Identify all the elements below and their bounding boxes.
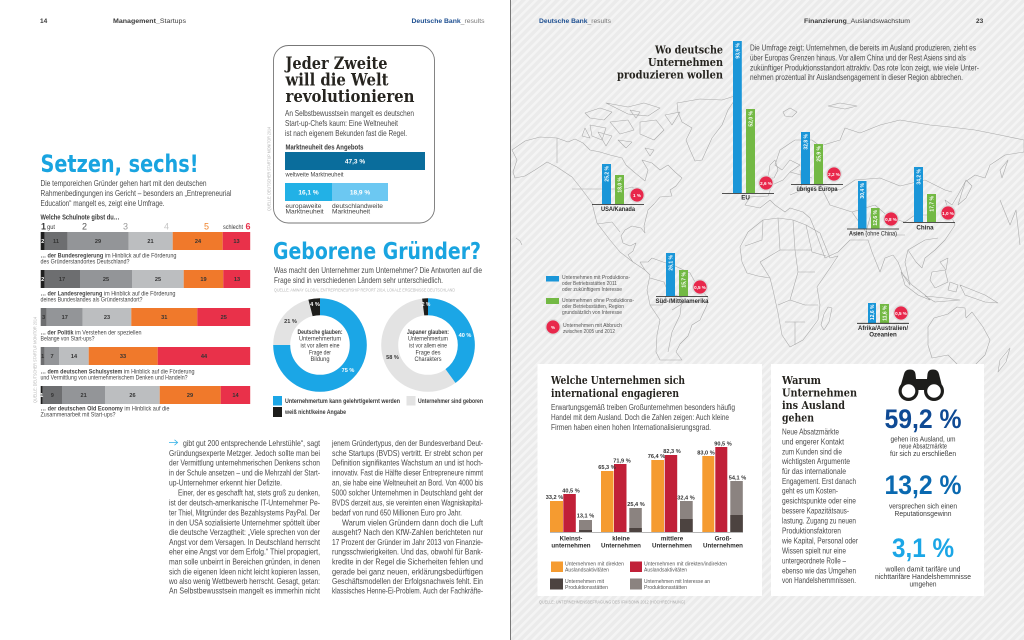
map bars: Asien (ohne China) xyxy=(847,181,899,238)
body text: und engerer Kontakt xyxy=(782,436,845,446)
intro text: ist nach eigenem Bekunden fast die Regel. xyxy=(285,128,407,138)
chart legend: Produktionsstätten xyxy=(644,585,687,591)
stat: 59,2 %: gehen ins Ausland, um xyxy=(890,434,956,444)
intro text xyxy=(40,178,232,208)
bar chart: 65,3 % xyxy=(598,465,616,471)
map bars: übriges Europa: 25,9 % xyxy=(816,145,822,162)
map bars: Afrika/Australien/Ozeanien: Ozeanien xyxy=(869,332,897,338)
article text: column 2: an, sie habe eine Weltneuheit an Bord. Von 4000 bis xyxy=(332,477,483,487)
panel: Setzen, sechs! school grades xyxy=(32,150,251,418)
map bars: USA/Kanada: 18,0 % xyxy=(617,176,623,193)
header: left page: Management_ Startups xyxy=(113,18,187,25)
bar chart: 76,4 % xyxy=(648,454,665,460)
source note: QUELLE: AMWAY GLOBAL ENTREPRENEURSHIP REPORT 2014, LOKALE ERGEBNISSE DEUTSCHLAND xyxy=(274,288,456,292)
bar captions: und Vermittlung von unternehmerischem Denken und Handeln? xyxy=(40,374,188,382)
map bars: EU: 93,9 % xyxy=(735,42,741,59)
chart legend: Auslandsaktivitäten xyxy=(644,568,687,574)
intro text xyxy=(274,265,482,285)
source note: international: QUELLE: UNTERNEHMENSBEFRAGUNG DES IFM BONN 2012 (HOCHRECHNUNG) xyxy=(539,600,685,604)
bar: weltweite Marktneuheit xyxy=(285,152,425,178)
stat: 13,2 % xyxy=(884,470,962,518)
bar: weltweite Marktneuheit: 47,3 % xyxy=(345,158,365,166)
header: right page: 23 xyxy=(976,18,984,25)
bar captions: … dem deutschen Schulsystem im Hinblick auf die Förderung xyxy=(40,368,195,376)
grade scale: 1 xyxy=(41,222,46,232)
map legend: Unternehmen mit Abbruch xyxy=(563,323,622,329)
grade scale: 3 xyxy=(123,222,128,232)
bar values: 29 xyxy=(187,393,193,399)
bar chart: 32,4 % xyxy=(677,496,695,502)
bar chart: 33,2 % xyxy=(546,495,563,501)
heading: Setzen, sechs!: Setzen, sechs! xyxy=(40,150,198,178)
map bars: USA/Kanada: 1 % xyxy=(633,193,641,198)
map bars: übriges Europa: übriges Europa xyxy=(796,186,838,193)
donut chart: Japaner: 40 % xyxy=(459,333,471,339)
bar chart: 83,0 % xyxy=(697,450,715,456)
bar values: 17 xyxy=(59,277,65,283)
bar values: 25 xyxy=(103,277,109,283)
source note: QUELLE: DEUTSCHER STARTUP MONITOR 2014 xyxy=(266,127,272,211)
bar values: 14 xyxy=(71,354,78,360)
bar captions: Belange von Start-ups? xyxy=(40,336,95,342)
bar values: 26 xyxy=(129,393,136,399)
article text: column 1: der Vermittlung unternehmerischen Denkens schon xyxy=(169,458,320,468)
map bars: Süd-/Mittelamerika xyxy=(656,253,709,305)
stat: 3,1 % xyxy=(875,533,971,588)
grade scale: 2 xyxy=(82,222,87,232)
bar captions: des Gründerstandortes Deutschland? xyxy=(40,258,130,266)
intro text: Start-up-Chefs kaum: Eine Weltneuheit xyxy=(285,118,399,128)
map intro text xyxy=(750,42,979,82)
article text: column 2: klassisches Henne-Ei-Problem. Auch der Fachkräfte- xyxy=(332,586,483,596)
heading xyxy=(284,54,414,107)
donut chart: Japaner: Frage des xyxy=(416,350,440,356)
map legend: oder Betriebsstätten, Region xyxy=(562,304,624,310)
article text: column 1: Angst vor dem Versagen. In Deutschland herrscht xyxy=(169,537,321,547)
bar captions: … der deutschen Old Economy im Hinblick auf die xyxy=(40,406,170,412)
rounded box xyxy=(274,46,434,223)
panel background xyxy=(538,364,762,596)
world map outline xyxy=(512,95,1024,372)
map bars: China: China xyxy=(916,224,934,232)
article text: column 1: Einer, der es geschafft hat, stets groß zu denken, xyxy=(178,487,320,497)
stat: 3,1 %: wollen damit tarifäre und xyxy=(885,564,960,574)
body text: Wissen spielt nur eine xyxy=(782,546,846,556)
intro text xyxy=(551,402,735,432)
map bars: Asien (ohne China): 0,8 % xyxy=(885,217,897,222)
heading: international engagieren xyxy=(551,386,680,400)
body text: wie Kapital, Personal oder xyxy=(781,535,858,545)
bar captions: … der Bundesregierung im Hinblick auf die Förderung xyxy=(40,252,177,260)
bar: europaweite Marktneuheit xyxy=(285,183,332,216)
bar chart: mittlere xyxy=(661,536,684,542)
donut legend xyxy=(273,396,483,417)
donut chart: Deutsche: ist vor allem eine xyxy=(300,342,340,350)
heading: Warum xyxy=(781,373,821,387)
bar chart: Unternehmen xyxy=(652,542,692,550)
donut chart: Japaner: Unternehmertum xyxy=(408,336,448,342)
intro text: An Selbstbewusstsein mangelt es deutschen xyxy=(285,108,414,118)
chart legend: Unternehmen mit direkten xyxy=(565,562,624,568)
bar captions: … der Politik im Verstehen der speziellen xyxy=(40,330,142,336)
article text: column 1: in den USA sozialisierte Unternehmer spöttelt über xyxy=(169,517,320,527)
bar chart: kleine xyxy=(612,536,630,542)
header: left page: 14 xyxy=(40,18,48,25)
donut chart: Deutsche xyxy=(282,302,358,383)
donut legend: Unternehmer sind geboren xyxy=(418,398,483,405)
grade scale: schlecht xyxy=(223,224,243,231)
bar chart: Kleinst- xyxy=(560,536,582,542)
intro text: Handel mit dem Ausland. Doch die Zahlen zeigen: Auch kleine xyxy=(551,412,729,422)
donut chart: Deutsche: Unternehmertum xyxy=(299,336,341,342)
bar values: 21 xyxy=(80,393,87,399)
article text: column 2: ausgeht? Nach den KfW-Zahlen berichteten nur xyxy=(332,527,483,537)
header: right page: Deutsche Bank_results xyxy=(539,18,612,25)
heading: revolutionieren xyxy=(286,87,414,107)
map bars: China xyxy=(903,167,956,232)
article text: column 1: Gründungsexperte Metzger. Jedoch sollte man bei xyxy=(169,448,320,458)
map bars: USA/Kanada: USA/Kanada xyxy=(601,206,636,213)
bar captions: Zusammenarbeit mit Start-ups? xyxy=(40,412,116,418)
article text: column 1: die deutsche Verzagtheit: „Viele sprechen von der xyxy=(169,527,320,537)
grade scale: gut xyxy=(47,224,55,231)
map bars: EU: EU xyxy=(741,194,750,202)
stacked bars xyxy=(41,232,250,404)
map bars: EU: 2,6 % xyxy=(760,181,772,186)
donut legend: weiß nicht/keine Angabe xyxy=(284,409,346,416)
body text: lastung. Zugang zu neuen xyxy=(782,516,856,526)
article text: column 2: 5000 solcher Unternehmen in Deutschland geht der xyxy=(332,487,483,497)
bar values: 1 xyxy=(41,354,44,360)
article text: column 2: bedarf von rund 650 Millionen Euro pro Jahr. xyxy=(332,507,462,517)
article text: column 1: eher eine Angst vor dem Erfolg.“ Thiel propagiert, xyxy=(169,547,320,557)
arrow xyxy=(169,440,178,445)
heading: Jeder Zweite xyxy=(284,54,388,74)
article text: column 2 xyxy=(331,438,484,596)
body text: gesichtspunkte oder eine xyxy=(782,496,856,506)
map bars: übriges Europa: 2,2 % xyxy=(828,172,840,177)
article text: column 1: wo also wenig Wettbewerb herrscht. Gesagt, getan: xyxy=(168,576,320,586)
bar values: 17 xyxy=(62,315,68,321)
map bars: Afrika/Australien/Ozeanien: Afrika/Australien/ xyxy=(858,325,908,332)
donut chart: Japaner: 2 % xyxy=(422,302,431,308)
body text: für das internationale xyxy=(782,466,846,476)
bar chart: Unternehmen xyxy=(703,542,743,550)
map legend: Unternehmen mit Produktions- xyxy=(562,275,630,281)
donut chart: Deutsche: 75 % xyxy=(342,368,354,374)
chart legend: Unternehmen mit xyxy=(565,579,604,585)
donut chart: Deutsche: Frage der xyxy=(309,350,331,356)
article text: column 1: An Selbstbewusstsein mangelt es immerhin nicht xyxy=(169,586,321,596)
map legend xyxy=(545,275,634,335)
panel: Geborene Gründer? xyxy=(273,239,483,417)
panel: Jeder Zweite will die Welt revolutionieren xyxy=(266,46,434,223)
article text: column 2: BVDS derzeit aus, sie vereinten einen Wagniskapital- xyxy=(332,497,483,507)
bar values: 3 xyxy=(42,315,45,321)
donut chart: Deutsche: Bildung xyxy=(310,356,330,363)
bar: deutschlandweite Marktneuheit: Marktneuheit xyxy=(332,208,370,216)
bar values: 11 xyxy=(53,239,59,245)
article text: column 1: up-Unternehmer erkennt hier Defizite. xyxy=(169,477,282,487)
heading: Wo deutsche Unternehmen produzieren wollen: Wo deutsche xyxy=(654,44,723,56)
map bars: EU: 52,0 % xyxy=(748,110,754,127)
bar values: 25 xyxy=(155,277,161,283)
intro text: Rahmenbedingungen ins Gericht – besonders an „Entrepreneurial xyxy=(40,188,232,198)
bar chart: 90,5 % xyxy=(714,442,732,448)
heading: Geborene Gründer? xyxy=(273,239,481,265)
intro text: Erwartungsgemäß treiben Großunternehmen besonders häufig xyxy=(551,402,735,412)
intro text: Firmen haben einen hohen Internationalisierungsgrad. xyxy=(551,422,711,432)
article text: column 2: rungsschwierigkeiten. Und das, obwohl für Bank- xyxy=(332,547,483,557)
bar chart: Unternehmen xyxy=(601,542,641,550)
bar captions: deines Bundeslandes als Gründerstandort? xyxy=(40,296,143,304)
body text: Produktionsfaktoren xyxy=(782,525,841,535)
body text xyxy=(781,426,858,585)
map bars: Asien (ohne China): 12,6 % xyxy=(873,209,879,226)
donut chart: Japaner: ist vor allem eine xyxy=(409,342,447,350)
bar captions: … der Landesregierung im Hinblick auf die Förderung xyxy=(40,290,176,298)
heading: Unternehmen xyxy=(782,386,858,400)
bar: europaweite Marktneuheit: 16,1 % xyxy=(298,190,319,196)
map intro text: nehmen prozentual ihr Auslandsengagement in dieser Region abbrechen. xyxy=(750,72,963,82)
header: right page: Finanzierung_ Auslandswachstum xyxy=(804,18,910,25)
article text: column 2: kredite in der Regel die Sicherheiten fehlen und xyxy=(332,556,483,566)
header: left page: Deutsche Bank _results xyxy=(412,18,485,25)
map bars: übriges Europa xyxy=(791,132,843,193)
chart legend: Unternehmen mit direkten/indirekten xyxy=(644,562,727,568)
article text: column 2: sche Startups (BVDS) vertritt. Er strebt schon per xyxy=(332,448,483,458)
bar values: 13 xyxy=(233,239,240,245)
chart title: Marktneuheit des Angebots xyxy=(286,144,364,152)
heading: gehen xyxy=(782,410,815,424)
stat: 59,2 % xyxy=(884,404,962,458)
stat: 3,1 %: umgehen xyxy=(910,580,936,588)
heading: Wo deutsche Unternehmen produzieren wollen: Unternehmen xyxy=(648,56,723,69)
map bars: China: 17,7 % xyxy=(929,195,935,212)
article text: column 1 xyxy=(168,438,321,596)
donut chart: Japaner xyxy=(386,302,471,383)
bar: deutschlandweite Marktneuheit: 18,9 % xyxy=(350,190,370,196)
bar values: 29 xyxy=(95,239,101,245)
bar captions xyxy=(40,252,195,418)
bar values: 33 xyxy=(120,354,126,360)
map bars: Asien (ohne China): Asien (ohne China) xyxy=(849,230,897,238)
donut chart: Japaner: 58 % xyxy=(386,355,399,361)
header: left page xyxy=(40,18,485,25)
article text: column 1: gibt gut 200 entsprechende Lehrstühle“, sagt xyxy=(183,438,321,448)
intro text: Education“ mangelt es, zeigt eine Umfrage. xyxy=(40,198,164,208)
map bars: China: 1,0 % xyxy=(942,211,954,216)
icon: binoculars xyxy=(898,370,944,401)
bar: deutschlandweite Marktneuheit: deutschlandweite xyxy=(332,203,383,210)
source note: QUELLE: DEUTSCHER STARTUP MONITOR 2014 xyxy=(32,317,38,403)
heading xyxy=(781,373,858,424)
body text: bessere Kapazitätsaus- xyxy=(782,506,849,516)
chart legend: Unternehmen mit Interesse an xyxy=(644,579,710,585)
map bars: Asien (ohne China): 30,4 % xyxy=(860,182,866,199)
intro text: Was macht den Unternehmer zum Unternehmer? Die Antworten auf die xyxy=(274,265,482,275)
map bars: übriges Europa: 32,8 % xyxy=(803,133,809,150)
article text: column 1: man solle unbeirrt in Bereichen gründen, in denen xyxy=(169,556,320,566)
bar chart: 54,1 % xyxy=(729,476,746,482)
bar chart: 13,1 % xyxy=(577,514,594,520)
map legend: oder zukünftigem Interesse xyxy=(562,287,622,293)
article text: column 2: gerade bei ganz neuen, erklärungsbedürftigen xyxy=(332,566,483,576)
donut chart: Deutsche: 21 % xyxy=(284,319,297,325)
chart legend xyxy=(550,562,727,591)
donut chart: Deutsche: 4 % xyxy=(310,302,320,308)
bar chart: 25,4 % xyxy=(627,502,645,508)
panel background xyxy=(771,364,984,596)
map bars: USA/Kanada xyxy=(592,164,645,213)
donut chart: Japaner: Charakters xyxy=(414,356,442,363)
article text: column 1: ter Thiel, Mitgründer des Bezahlsystems PayPal. Der xyxy=(169,507,320,517)
bar values: 1 xyxy=(40,393,43,399)
map bars: Süd-/Mittelamerika: 15,7 % xyxy=(681,271,687,288)
chart question: Welche Schulnote gibst du… xyxy=(40,214,120,222)
map legend: zwischen 2005 und 2012 xyxy=(563,329,615,335)
bar values: 14 xyxy=(232,393,239,399)
stat: 59,2 %: neue Absatzmärkte xyxy=(899,442,947,451)
map bars: Afrika/Australien/Ozeanien xyxy=(857,303,909,338)
bar values: 13 xyxy=(234,277,240,283)
donut chart: Japaner: Japaner glauben: xyxy=(407,329,449,336)
grade scale xyxy=(41,222,251,232)
article text: column 1: sich die eigenen Ideen nicht leicht kopieren lassen, xyxy=(169,566,320,576)
map bars: USA/Kanada: 25,2 % xyxy=(604,165,610,182)
body text: Engagement. Erst danach xyxy=(782,476,856,486)
article text: column 2: Definition signifikantes Wachstum an und ist hoch- xyxy=(332,458,483,468)
stat: 59,2 %: 59,2 % xyxy=(884,404,962,434)
donut chart: Deutsche: Deutsche glauben: xyxy=(298,329,342,336)
body text: untergeordnete Rolle – xyxy=(782,555,846,565)
bar values: 24 xyxy=(195,239,202,245)
heading: Wo deutsche Unternehmen produzieren wollen xyxy=(617,44,723,82)
map bars: China: 34,2 % xyxy=(916,168,922,185)
body text: ebenso wie das Umgehen xyxy=(782,565,856,575)
article text: column 2: Warum vielen Gründern dann doch die Luft xyxy=(342,517,484,527)
stat: 13,2 %: versprechen sich einen xyxy=(889,502,957,510)
bar chart: 40,5 % xyxy=(562,488,580,494)
stat: 13,2 %: Reputationsgewinn xyxy=(894,509,952,518)
body text: geht es um Kosten- xyxy=(782,486,838,496)
bar: europaweite Marktneuheit: europaweite xyxy=(286,203,322,210)
map legend: grundsätzlich von Interesse xyxy=(562,310,622,316)
map legend: oder Betriebsstätten 2011 xyxy=(562,281,617,287)
bar values: 44 xyxy=(201,354,208,360)
map bars: Afrika/Australien/Ozeanien: 12,6 % xyxy=(870,304,876,320)
map bars: Süd-/Mittelamerika: 26,1 % xyxy=(668,254,674,271)
bar chart: 71,9 % xyxy=(613,458,631,464)
chart legend: Auslandsaktivitäten xyxy=(565,568,609,574)
heading xyxy=(550,373,685,400)
bar chart: Groß- xyxy=(715,536,731,542)
bar: deutschlandweite Marktneuheit xyxy=(332,183,388,216)
panel: Welche Unternehmen sich international engagieren xyxy=(538,364,762,596)
bar values: 23 xyxy=(104,315,110,321)
article text: column 2: jenem Gründertypus, den der Bundesverband Deut- xyxy=(331,438,483,448)
grade scale: 4 xyxy=(164,222,169,232)
map bars: Süd-/Mittelamerika: 0,5 % xyxy=(694,285,706,290)
article text: column 2: Geschäftsmodellen der Erfolgsnachweis fehlt. Ein xyxy=(332,576,483,586)
map bars: Afrika/Australien/Ozeanien: 11,6 % xyxy=(882,305,888,321)
chart legend: Produktionsstätten xyxy=(565,585,608,591)
bar chart: 82,3 % xyxy=(663,449,681,455)
article text: column 1: in der Schule ansetzen – und die Mehrzahl der Start- xyxy=(169,468,320,478)
heading: Welche Unternehmen sich xyxy=(550,373,685,387)
stat: 3,1 %: 3,1 % xyxy=(892,533,954,563)
body text: von Handelshemmnissen. xyxy=(782,575,856,585)
map legend: % xyxy=(551,325,555,330)
bar values: 9 xyxy=(51,393,54,399)
article text: column 1: ist der deutsch-amerikanische IT-Unternehmer Pe- xyxy=(169,497,320,507)
heading: Wo deutsche Unternehmen produzieren wollen: produzieren wollen xyxy=(617,68,723,82)
bar chart xyxy=(546,442,746,550)
header: right page xyxy=(539,18,984,25)
map bars: Afrika/Australien/Ozeanien: 0,5 % xyxy=(895,311,907,316)
map bars: Süd-/Mittelamerika: Süd-/Mittelamerika xyxy=(656,298,709,305)
bar values: 2 xyxy=(41,277,44,283)
bar values: 25 xyxy=(221,315,227,321)
bar values: 31 xyxy=(161,315,167,321)
bar: weltweite Marktneuheit: weltweite Marktneuheit xyxy=(285,172,344,178)
stat: 3,1 %: nichttarifäre Handelshemmnisse xyxy=(875,572,971,581)
body text: wichtigsten Argumente xyxy=(781,456,850,466)
bar values xyxy=(40,239,240,399)
bar values: 19 xyxy=(200,277,207,283)
map bars: EU xyxy=(722,41,774,202)
intro text: Frage sind in verschiedenen Ländern sehr unterschiedlich. xyxy=(274,275,443,285)
body text: zum Kunden sind die xyxy=(782,446,842,456)
grade scale: 6 xyxy=(246,222,251,232)
bar values: 2 xyxy=(41,239,44,245)
bar: europaweite Marktneuheit: Marktneuheit xyxy=(286,208,324,216)
donut legend: Unternehmertum kann gelehrt/gelernt werden xyxy=(285,398,400,405)
stat: 13,2 %: 13,2 % xyxy=(884,470,962,500)
heading: ins Ausland xyxy=(782,398,845,412)
intro text: Die temporeichen Gründer gehen hart mit den deutschen xyxy=(40,178,207,188)
bar values: 7 xyxy=(50,354,54,360)
bar chart: unternehmen xyxy=(551,542,591,550)
map legend: Unternehmen ohne Produktions- xyxy=(562,298,634,304)
panel: Warum Unternehmen ins Ausland gehen xyxy=(771,364,984,596)
intro text xyxy=(285,108,414,138)
body text: Neue Absatzmärkte xyxy=(782,426,839,436)
heading: will die Welt xyxy=(285,70,389,90)
stat: 59,2 %: für sich zu erschließen xyxy=(890,449,956,458)
article text: column 2: innovativ. Fast die Hälfte dieser Entrepreneure nimmt xyxy=(332,468,484,478)
article text: column 2: 17 Prozent der Gründer im Jahr 2013 von Finanzie- xyxy=(332,537,483,547)
grade scale: 5 xyxy=(204,222,209,232)
bar values: 21 xyxy=(147,239,154,245)
